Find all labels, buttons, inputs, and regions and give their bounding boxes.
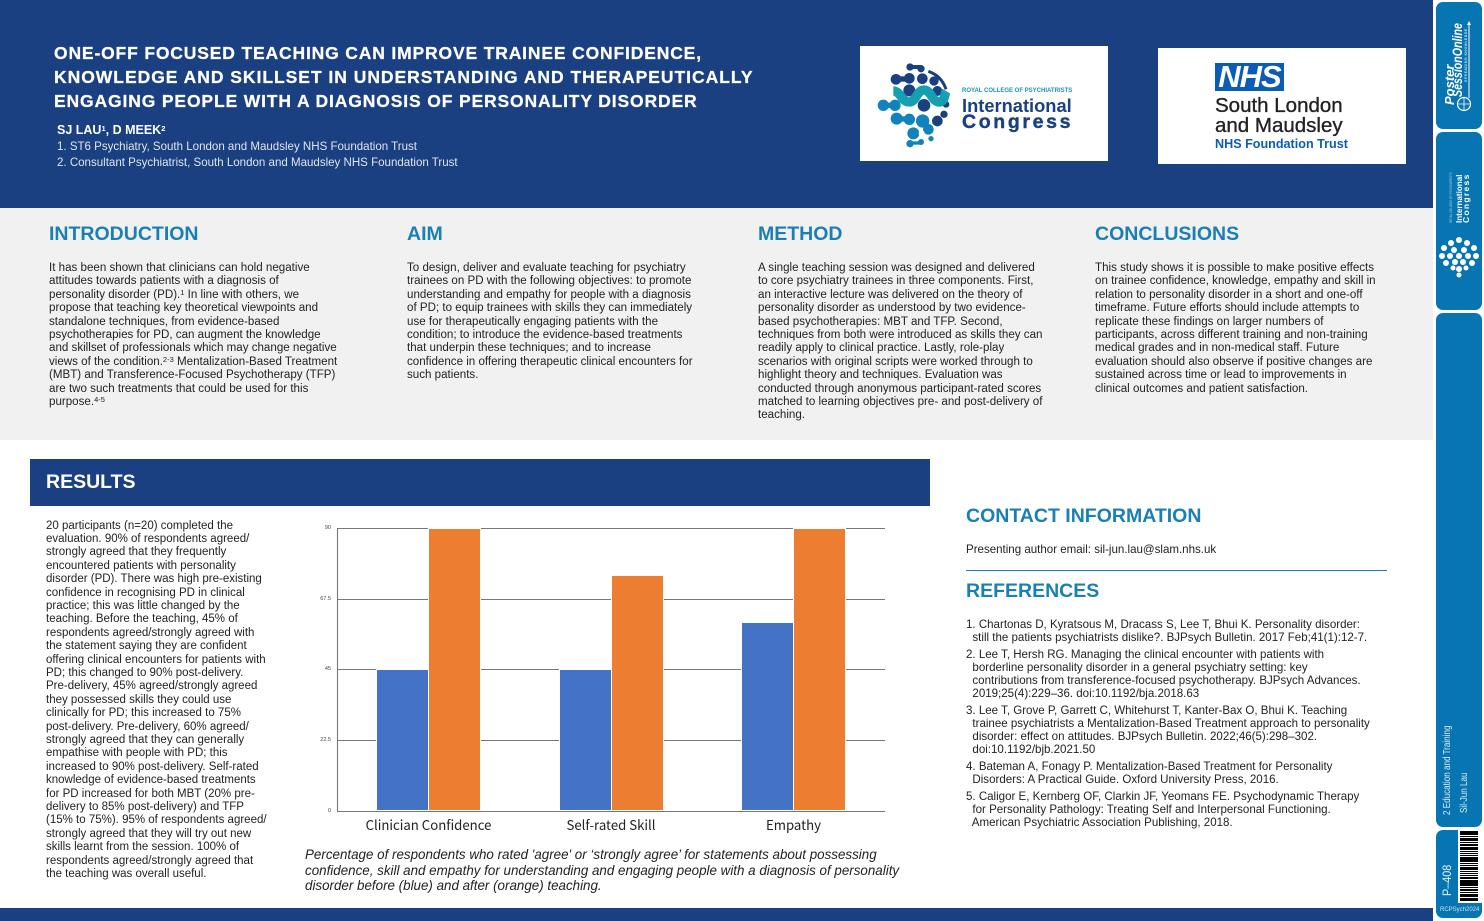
title: ONE-OFF FOCUSED TEACHING CAN IMPROVE TRAINEE CONFIDENCE, KNOWLEDGE AND SKILLSET IN UNDERSTANDING AND THERAPEUTICALLY ENGAGING PEOPLE WITH A DIAGNOSIS OF PERSONALITY DISORDER: [54, 42, 754, 110]
text: method: A single teaching session was designed and delivered to core psychiatry trainees in three components. First, an interactive lecture was delivered on the theory of personality disorder as understood by two evidence- based psychotherapies: MBT and TFP. Second, techniques from both were introduced as skills they can readily apply to clinical practice. Lastly, role-play scenarios with original scripts were worked through to highlight theory and techniques. Evaluation was conducted through anonymous participant-rated scores matched to learning objectives pre- and post-delivery of teaching.: [758, 262, 1042, 421]
side tab: poster session online: Poster: [1442, 65, 1457, 105]
side tab: poster session online: SessionOnline: [1448, 23, 1464, 97]
side tab: international congress: International: [1454, 175, 1464, 223]
panel: introduction: [49, 223, 338, 408]
y axis labels: 90: [325, 525, 331, 531]
header band: [0, 0, 1433, 208]
y axis labels: 67.5: [320, 596, 331, 602]
text: contact email: Presenting author email: sil-jun.lau@slam.nhs.uk: [966, 544, 1216, 556]
bottom band: [0, 908, 1433, 921]
reference 5: 5. Caligor E, Kernberg OF, Clarkin JF, Yeomans FE. Psychodynamic Therapy for Personality Pathology: Treating Self and Interpersonal Functioning. American Psychiatric Association Publishing, 2018.: [966, 791, 1359, 829]
icon: arrow line and small globe: [1456, 21, 1472, 112]
side tab: poster number: [1436, 830, 1482, 918]
side tab: topic and author: Sil-Jun Lau: [1458, 773, 1470, 813]
side tab: poster number: P–408: [1440, 865, 1454, 896]
bar chart: [320, 525, 885, 834]
heading: aim: AIM: [407, 223, 443, 245]
y axis labels: 0: [328, 808, 331, 814]
side tab: international congress: [1436, 132, 1482, 310]
text: introduction: It has been shown that clinicians can hold negative attitudes towards patients with a diagnosis of personality disorder (PD).1 In line with others, we propose that teaching key theoretical viewpoints and standalone techniques, from evidence-based psychotherapies for PD, can augment the knowledge and skillset of professionals which may change negative views of the condition.2-3 Mentalization-Based Treatment (MBT) and Transference-Focused Psychotherapy (TFP) are two such treatments that could be used for this purpose.4-5: [49, 262, 337, 408]
bars: self-rated skill: [560, 576, 664, 810]
affiliations: 1. ST6 Psychiatry, South London and Maudsley NHS Foundation Trust 2. Consultant Psychiatrist, South London and Maudsley NHS Foundation Trust: [57, 141, 458, 169]
reference 3: 3. Lee T, Grove P, Garrett C, Whitehurst T, Kanter-Bax O, Bhui K. Teaching trainee psychiatrists a Mentalization-Based Treatment approach to personality disorder: effect on attitudes. BJPsych Bulletin. 2022;46(5):298–302. doi:10.1192/bjb.2021.50: [966, 705, 1370, 756]
panel: method: [758, 223, 1042, 421]
results banner: RESULTS: [46, 471, 136, 493]
text: conclusions: This study shows it is possible to make positive effects on trainee confidence, knowledge, empathy and skill in relation to personality disorder in a short and one-off timeframe. Future efforts should include attempts to replicate these findings on larger numbers of participants, across different training and non-training medical grades and in non-medical staff. Future evaluation should also observe if positive changes are sustained across time or lead to improvements in clinical outcomes and patient satisfaction.: [1095, 262, 1376, 395]
heading: contact information: CONTACT INFORMATION: [966, 505, 1201, 527]
heading: references: REFERENCES: [966, 580, 1099, 602]
side tab: international congress: Congress: [1461, 173, 1471, 223]
y axis labels: 22.5: [320, 737, 331, 743]
barcode: [1458, 830, 1482, 903]
heading: method: METHOD: [758, 223, 842, 245]
heading: introduction: INTRODUCTION: [49, 223, 198, 245]
panel: conclusions: [1095, 223, 1376, 395]
side tab: poster number: RCPSych2024: [1440, 907, 1479, 913]
reference 2: 2. Lee T, Hersh RG. Managing the clinical encounter with patients with borderline personality disorder in a general psychiatry setting: key contributions from transference-focused psychotherapy. BJPsych Advances. 2019;25(4):229–36. doi:10.1192/bja.2018.63: [966, 649, 1361, 700]
icon: congress globe: [878, 63, 950, 148]
logo: NHS South London and Maudsley: NHS Foundation Trust: [1215, 136, 1348, 150]
side tab: international congress: ROYAL COLLEGE OF PSYCHIATRISTS: [1449, 172, 1453, 223]
y axis labels: [320, 525, 331, 814]
side tab: topic and author: [1436, 313, 1482, 827]
authors: SJ LAU1, D MEEK2: [57, 123, 165, 137]
text: results: 20 participants (n=20) completed the evaluation. 90% of respondents agreed/ strongly agreed that they frequently encountered patients with personality disorder (PD). There was high pre-existing confidence in recognising PD in clinical practice; this was little changed by the teaching. Before the teaching, 45% of respondents agreed/strongly agreed with the statement saying they are confident offering clinical encounters for patients with PD; this changed to 90% post-delivery. Pre-delivery, 45% agreed/strongly agreed they possessed skills they could use clinically for PD; this increased to 75% post-delivery. Pre-delivery, 60% agreed/ strongly agreed that they can generally empathise with people with PD; this increased to 90% post-delivery. Self-rated knowledge of evidence-based treatments for PD increased for both MBT (20% pre- delivery to 85% post-delivery) and TFP (15% to 75%). 95% of respondents agreed/ strongly agreed that they will try out new skills learnt from the session. 100% of respondents agreed/strongly agreed that the teaching was overall useful.: [46, 520, 267, 880]
y axis labels: 45: [325, 666, 331, 672]
side tab: poster session online: [1436, 2, 1482, 129]
logo: RCPsych International Congress: [860, 46, 1108, 161]
icon: congress globe: [1439, 237, 1479, 278]
logo: NHS South London and Maudsley: South London and Maudsley: [1215, 94, 1343, 137]
category labels: Empathy: [766, 815, 821, 834]
logo: RCPsych International Congress: International: [962, 95, 1072, 116]
side tab: poster session online: SPREADING KNOWLEDGE: [1464, 28, 1468, 82]
bars: empathy: [742, 528, 846, 810]
chart caption: Percentage of respondents who rated 'agree' or ‘strongly agree’ for statements about possessing confidence, skill and empathy for understanding and engaging people with a diagnosis of personality disorder before (blue) and after (orange) teaching.: [305, 847, 899, 893]
heading: conclusions: CONCLUSIONS: [1095, 223, 1239, 245]
category labels: [366, 815, 821, 834]
logo: RCPsych International Congress: ROYAL COLLEGE OF PSYCHIATRISTS: [962, 88, 1072, 94]
side tab: topic and author: 2 Education and Training: [1441, 726, 1453, 815]
bars: clinician confidence: [376, 528, 480, 810]
category labels: Self-rated Skill: [566, 815, 656, 834]
reference 4: 4. Bateman A, Fonagy P. Mentalization-Based Treatment for Personality Disorders: A Practical Guide. Oxford University Press, 2016.: [966, 761, 1332, 786]
text: aim: To design, deliver and evaluate teaching for psychiatry trainees on PD with the following objectives: to promote understanding and empathy for people with a diagnosis of PD; to equip trainees with skills they can immediately use for therapeutically engaging patients with the condition; to introduce the evidence-based treatments that underpin these techniques; and to increase confidence in offering therapeutic clinical encounters for such patients.: [407, 262, 693, 381]
reference 1: 1. Chartonas D, Kyratsous M, Dracass S, Lee T, Bhui K. Personality disorder: still the patients psychiatrists dislike?. BJPsych Bulletin. 2017 Feb;41(1):12-7.: [966, 619, 1367, 644]
references list: [966, 619, 1370, 829]
panel: aim: [407, 223, 693, 381]
category labels: Clinician Confidence: [366, 815, 491, 834]
logo: RCPsych International Congress: Congress: [962, 111, 1073, 133]
logo: NHS South London and Maudsley: [1158, 48, 1406, 164]
grey sections band: [0, 208, 1433, 440]
results banner: [30, 459, 930, 506]
